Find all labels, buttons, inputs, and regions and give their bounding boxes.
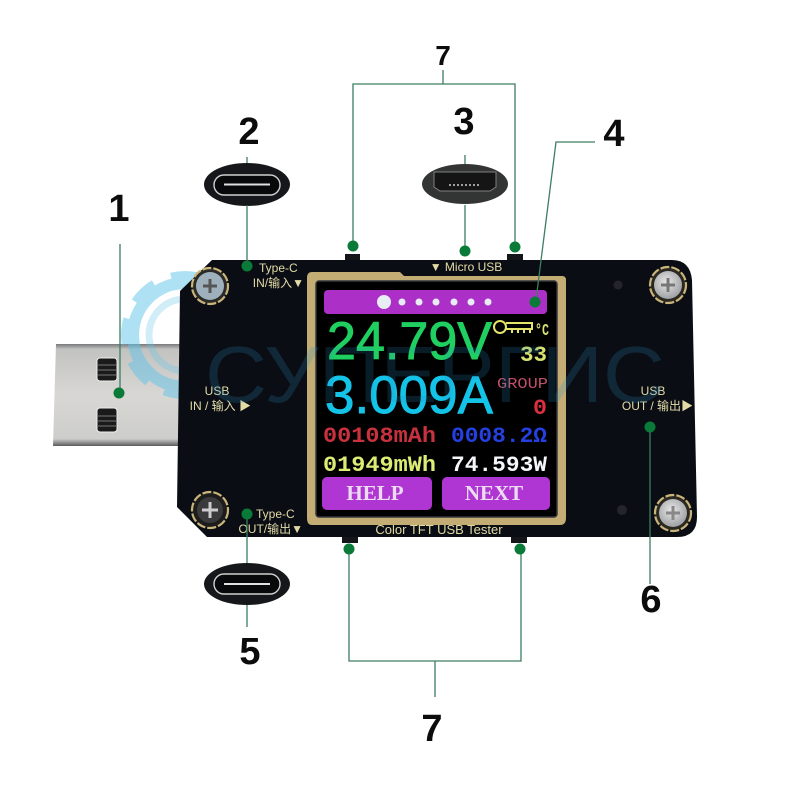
side button tabs	[342, 254, 527, 543]
screen: status bar	[324, 290, 547, 314]
mounting screw top left	[192, 268, 228, 304]
callout 4: display: 4	[603, 113, 625, 155]
screen: energy mWh: 01949mWh	[323, 453, 436, 478]
board label: USB in: USB	[205, 384, 229, 398]
screen button: NEXT: NEXT	[465, 481, 523, 505]
callout 4: display	[530, 113, 625, 308]
plug contact hole lower	[97, 408, 117, 432]
connector photo: Type-C out	[204, 563, 290, 605]
screen gold frame	[307, 272, 566, 525]
callout 7: bottom buttons	[344, 544, 526, 750]
board hole top	[614, 280, 622, 290]
plug contact hole upper	[97, 358, 117, 381]
board label: USB out: USB	[641, 384, 665, 398]
board label: Type-C out	[238, 507, 303, 536]
screen: group label: GROUP	[497, 376, 548, 393]
board label: Micro USB: ▼ Micro USB	[430, 260, 502, 274]
board label: Type-C in	[253, 261, 304, 290]
board label: Type-C out: OUT/输出▼	[238, 521, 303, 536]
callout 5: Type-C out: 5	[239, 631, 261, 673]
board hole bottom	[617, 505, 627, 515]
screen: voltage: 24.79V	[327, 312, 493, 371]
icon: thermometer	[494, 321, 532, 333]
callout 1: USB plug in	[108, 188, 130, 398]
watermark text: СУПЕРГИС	[205, 330, 665, 419]
usb plug	[53, 344, 182, 446]
board label: Type-C in: Type-C	[259, 261, 298, 275]
callout 1: USB plug in: 1	[108, 188, 130, 230]
screen button: HELP	[322, 477, 432, 510]
board label: Type-C in: IN/输入▼	[253, 275, 304, 290]
board label: USB in	[190, 384, 251, 413]
board label: USB out: OUT / 输出▶	[622, 398, 693, 413]
screen: power: 74.593W	[451, 453, 548, 478]
board label: Type-C out: Type-C	[256, 507, 295, 521]
mounting screw top right	[650, 267, 686, 303]
callout 2: Type-C in	[238, 111, 260, 272]
callout 7: bottom buttons: 7	[421, 708, 443, 750]
screen: capacity mAh: 00108mAh	[323, 424, 436, 449]
callout 6: USB out	[640, 422, 662, 621]
callout 3: Micro USB: 3	[453, 101, 475, 143]
connector photo: Type-C in	[204, 163, 290, 206]
board label: USB in: IN / 输入 ▶	[190, 398, 251, 413]
callout 2: Type-C in: 2	[238, 111, 260, 153]
screen: resistance: 0008.2Ω	[451, 424, 547, 449]
screen: group value: 0	[533, 396, 547, 421]
board label: USB out	[622, 384, 693, 413]
watermark gear	[130, 280, 240, 390]
callout 3: Micro USB	[453, 101, 475, 256]
connector photo: Micro USB	[422, 164, 508, 204]
callout 7: top buttons: 7	[435, 40, 451, 71]
callout 6: USB out: 6	[640, 579, 662, 621]
screen button: NEXT	[442, 477, 550, 510]
screen: temperature: 33	[520, 343, 547, 368]
screen: degree unit: °C	[535, 322, 549, 341]
screen: current: 3.009A	[325, 366, 494, 425]
board label: Color TFT USB Tester: Color TFT USB Tester	[375, 522, 503, 537]
screen button: HELP: HELP	[346, 481, 404, 505]
page indicator dots	[377, 295, 492, 309]
mounting screw bottom left	[192, 492, 228, 528]
callout 5: Type-C out	[239, 508, 261, 673]
callout 7: top buttons	[348, 40, 520, 252]
device board	[177, 254, 697, 543]
mounting screw bottom right	[655, 495, 691, 531]
